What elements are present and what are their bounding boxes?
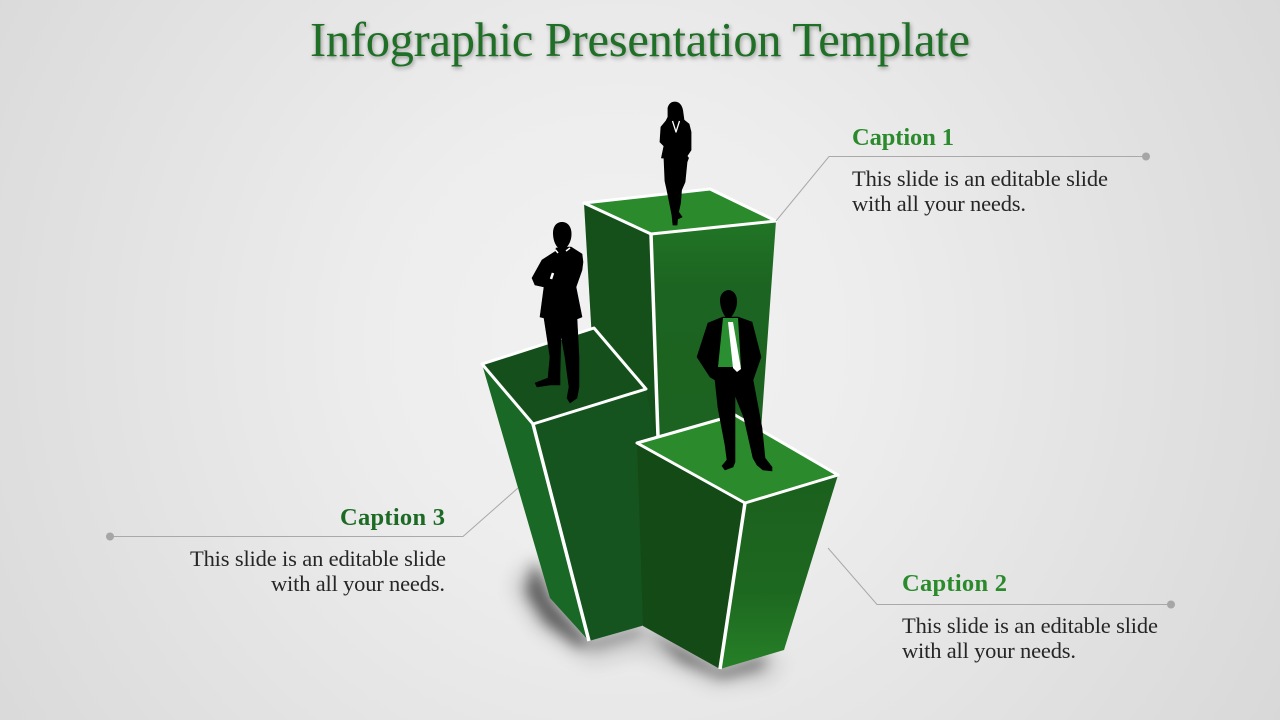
callout: caption 2: Caption 2 xyxy=(902,570,1007,597)
callout: caption 2 xyxy=(828,548,1175,663)
callout: caption 1: with all your needs. xyxy=(852,191,1026,216)
icon: businessman with green shirt silhouette xyxy=(697,290,772,471)
callout: caption 2: This slide is an editable slide xyxy=(902,613,1158,638)
icon: businessman arms crossed silhouette xyxy=(532,222,583,403)
callout: caption 3: Caption 3 xyxy=(340,504,445,531)
callout: caption 3 xyxy=(106,488,518,596)
icon: businesswoman silhouette xyxy=(660,102,691,225)
callout: caption 1 xyxy=(776,124,1150,221)
callout: caption 2: with all your needs. xyxy=(902,638,1076,663)
bar: left column xyxy=(482,328,656,641)
bar: right front column xyxy=(637,415,838,669)
callout: caption 1: This slide is an editable slide xyxy=(852,166,1108,191)
title: Infographic Presentation Template xyxy=(310,14,970,67)
callout: caption 3: This slide is an editable slide xyxy=(190,546,446,571)
bar shadows xyxy=(512,560,785,685)
bar: tall back column xyxy=(584,189,776,440)
callout: caption 1: Caption 1 xyxy=(852,124,954,151)
callout: caption 3: with all your needs. xyxy=(271,571,445,596)
